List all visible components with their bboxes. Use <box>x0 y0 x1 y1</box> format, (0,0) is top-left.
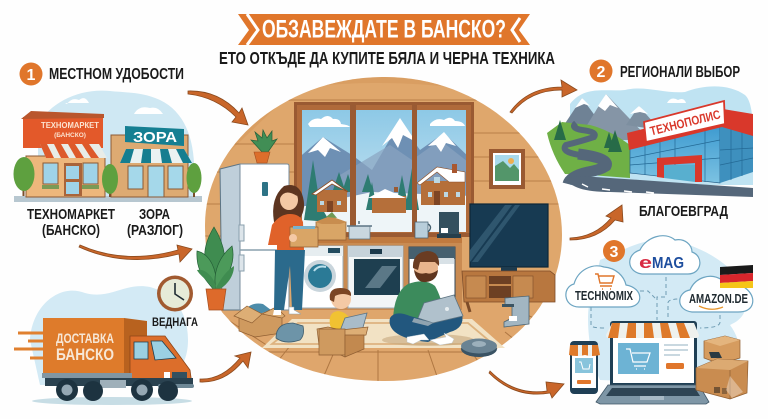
arrow: local shops to room top <box>188 91 248 125</box>
rug <box>262 319 505 348</box>
boy in box <box>317 288 368 357</box>
flag: Germany <box>720 265 753 288</box>
dishwasher <box>409 247 455 309</box>
picture on wall <box>489 149 525 189</box>
shop labels: ЗОРА <box>139 206 170 223</box>
title banner <box>238 14 530 45</box>
shop labels: ТЕХНОМАРКЕТ <box>27 206 115 223</box>
section 1 heading: МЕСТНОМ УДОБОСТИ <box>49 66 184 83</box>
TV cabinet <box>462 271 555 314</box>
television <box>470 204 548 271</box>
section 2 heading <box>590 60 740 82</box>
arrow: delivery to room <box>200 352 251 382</box>
shop labels <box>27 206 183 239</box>
wall <box>200 70 570 315</box>
illustration: local shops <box>14 91 202 202</box>
building: ТЕХНОПОЛИС <box>649 107 722 138</box>
refrigerator <box>220 164 289 310</box>
laptop <box>596 321 709 404</box>
illustration: delivery truck <box>14 286 194 405</box>
cloud: eMAG: e <box>639 253 652 272</box>
arrow: room to Blagoevgrad <box>570 205 623 240</box>
floor <box>221 305 541 381</box>
trees <box>14 157 202 197</box>
woman <box>268 185 305 315</box>
label: immediately: ВЕДНАГА <box>152 315 198 329</box>
subtitle: ЕТО ОТКЪДЕ ДА КУПИТЕ БЯЛА И ЧЕРНА ТЕХНИКА <box>219 48 555 68</box>
dashed connectors <box>591 277 720 328</box>
man with laptop <box>382 251 474 346</box>
arrow: room to online shopping <box>489 371 564 398</box>
large potted plant <box>197 227 234 310</box>
cloud: eMAG: MAG <box>652 255 684 272</box>
bag on floor <box>276 323 304 342</box>
shop labels: (БАНСКО) <box>42 222 100 239</box>
oven <box>348 246 403 308</box>
clock <box>157 276 193 312</box>
badge 3 <box>603 240 625 262</box>
cabins <box>312 164 465 213</box>
window <box>294 102 474 237</box>
cloud: TechnoMIX: TECHNOMIX <box>575 288 633 303</box>
section 2 heading: 2 <box>597 64 606 81</box>
shop: Техномаркет: (БАНСКО) <box>54 132 86 139</box>
washing machine <box>298 246 343 308</box>
section 1 heading: 1 <box>27 67 36 84</box>
shop: Техномаркет: ТЕХНОМАРКЕТ <box>41 120 100 130</box>
shop labels: (РАЗЛОГ) <box>127 222 183 239</box>
shop: Зора: ЗОРА <box>133 129 177 146</box>
shop: Зора <box>111 126 192 197</box>
robot vacuum <box>461 338 497 357</box>
illustration: delivery truck: БАНСКО <box>56 345 114 364</box>
box held by woman <box>289 226 318 247</box>
arrow: room to regional store <box>510 80 577 113</box>
central circular room scene <box>200 70 570 385</box>
shop: Техномаркет <box>21 111 107 197</box>
illustration: Technopolis and mountain road <box>547 86 753 197</box>
cloud: Amazon.de <box>680 276 753 312</box>
items on counter: boxes, pot, kettle, coffee maker <box>315 212 461 240</box>
cardboard box with clothes <box>234 304 285 337</box>
coffee machine on floor <box>502 296 529 327</box>
label: Blagoevgrad: БЛАГОЕВГРАД <box>639 203 728 220</box>
cloud: Amazon.de: AMAZON.DE <box>689 291 748 306</box>
illustration: online shopping <box>566 236 753 404</box>
title banner: ОБЗАВЕЖДАТЕ В БАНСКО? <box>262 16 506 44</box>
kitchen counter <box>318 237 462 243</box>
stacked parcels <box>696 336 748 399</box>
cloud: TechnoMIX <box>566 266 640 307</box>
building <box>627 101 753 183</box>
plant on fridge <box>251 130 277 163</box>
phone <box>569 341 600 394</box>
arrow: shop labels to room <box>79 245 192 262</box>
illustration: delivery truck: ДОСТАВКА <box>56 330 114 346</box>
cloud: eMAG <box>630 236 700 274</box>
section 1 heading <box>20 62 184 86</box>
badge 3: 3 <box>610 244 619 261</box>
